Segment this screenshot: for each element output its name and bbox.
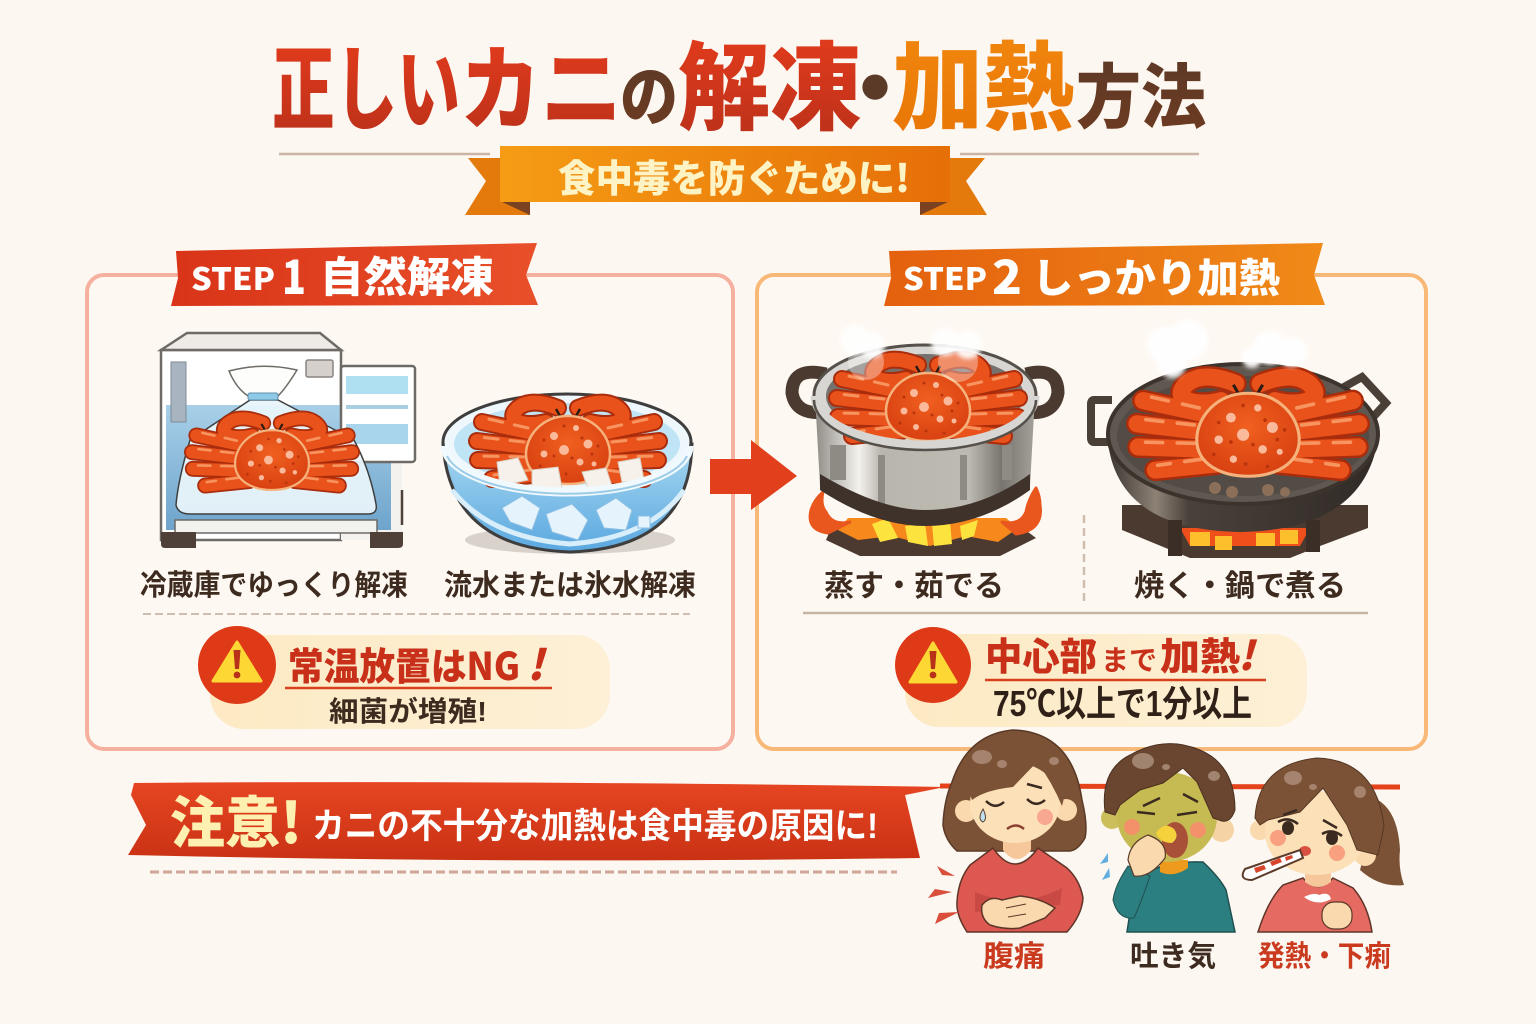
arrow — [710, 440, 797, 510]
title — [272, 11, 1206, 150]
step 1 banner: 自然解凍 — [320, 244, 494, 305]
panel: step 1 thawing — [87, 242, 733, 749]
label: nausea: 吐き気 — [1130, 940, 1216, 973]
warning banner: カニの不十分な加熱は食中毒の原因に! — [312, 807, 878, 846]
title: 正しい — [272, 16, 460, 149]
subtitle ribbon: 食中毒を防ぐために! — [558, 148, 910, 203]
warning: heat to the core: 加熱 — [1160, 626, 1240, 681]
step 2 banner: STEP — [903, 254, 987, 299]
icon: crab in bag in refrigerator — [161, 333, 415, 548]
warning banner — [128, 779, 1400, 860]
label: grill simmer: 焼く・鍋で煮る — [1134, 570, 1346, 603]
warning: room temperature — [198, 626, 610, 729]
subtitle ribbon — [279, 146, 1199, 215]
symptom: nausea person — [1100, 744, 1235, 932]
label: stomach ache: 腹痛 — [983, 940, 1045, 973]
title: の — [620, 44, 678, 140]
warning: heat to the core: 75℃以上で1分以上 — [993, 683, 1252, 724]
label: water thawing: 流水または氷水解凍 — [444, 569, 696, 602]
icon: pan on burner — [1091, 320, 1386, 558]
warning: heat to the core: 中心部 — [985, 626, 1097, 681]
warning: room temperature: 細菌が増殖! — [329, 695, 487, 727]
label: steam boil: 蒸す・茹でる — [824, 570, 1004, 603]
warning: heat to the core: ! — [1238, 624, 1258, 682]
warning: room temperature: ! — [527, 632, 548, 693]
step 1 banner — [171, 242, 538, 308]
symptom: fever person — [1243, 758, 1404, 932]
step 1 banner: 1 — [282, 242, 306, 308]
title: 方法 — [1076, 42, 1206, 143]
step 1 banner: STEP — [191, 254, 275, 299]
icon: pot on burner — [792, 325, 1058, 556]
warning: room temperature: 常温放置はNG — [288, 636, 520, 691]
title: 解凍 — [678, 11, 862, 150]
warning banner: 注意! — [170, 779, 302, 860]
icon: crab in ice water bowl — [443, 394, 692, 554]
step 2 banner — [884, 242, 1325, 308]
label: fever and diarrhea: 発熱・下痢 — [1258, 940, 1391, 973]
warning: heat to the core: まで — [1101, 645, 1157, 676]
warning: heat to the core — [895, 624, 1307, 727]
step 2 banner: 2 — [992, 242, 1022, 308]
title: ・ — [830, 17, 920, 147]
title: カニ — [460, 16, 622, 149]
title: 加熱 — [892, 11, 1074, 150]
label: refrigerator thawing: 冷蔵庫でゆっくり解凍 — [140, 569, 408, 602]
step 2 banner: しっかり加熱 — [1032, 246, 1280, 304]
panel: step 2 heating — [757, 242, 1426, 749]
symptom: stomach ache person — [928, 730, 1086, 932]
